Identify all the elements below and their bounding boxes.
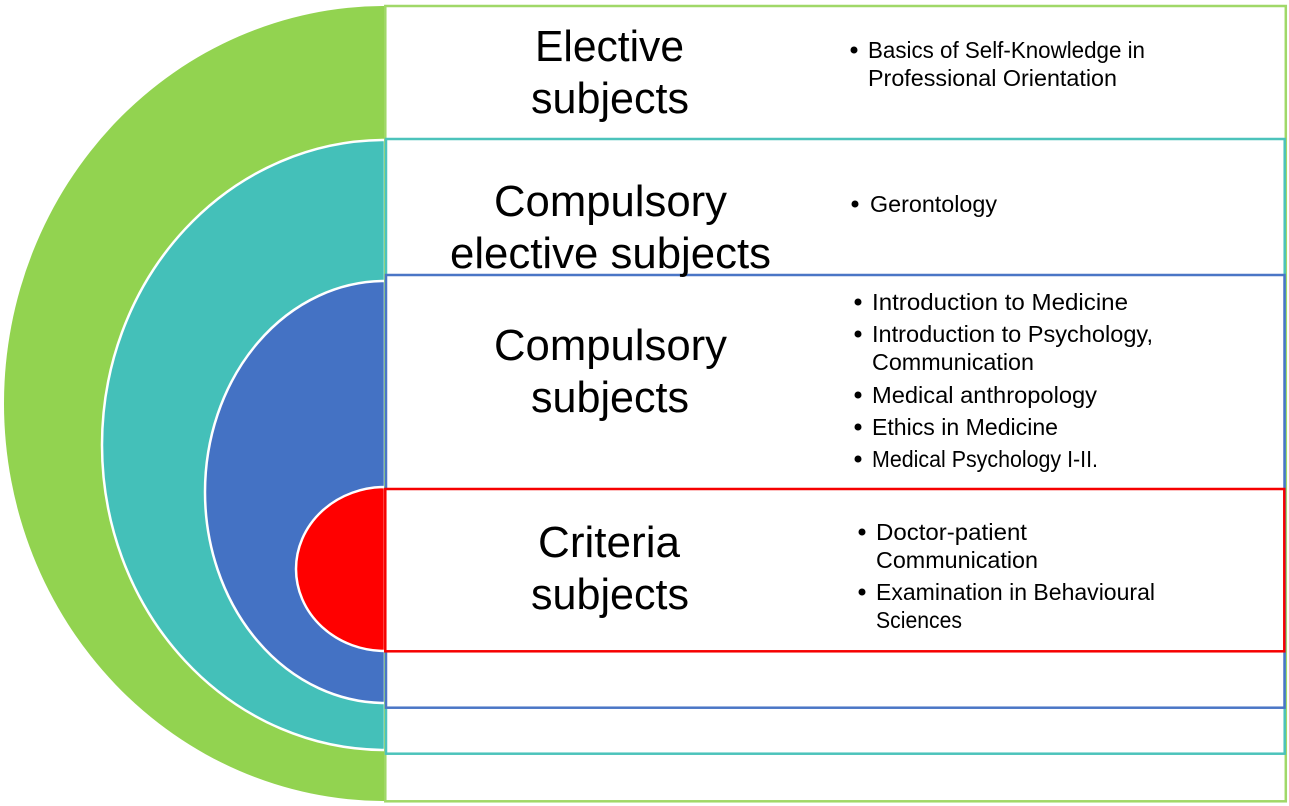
list: criteria subjects: Communication [876,547,1038,573]
heading: criteria subjects [531,518,689,619]
box: criteria outline [385,489,1284,651]
list: elective subjects: Professional Orientation [868,65,1117,91]
list: compulsory elective subjects: Gerontology [870,191,997,217]
heading: compulsory subjects: Compulsory [494,321,727,370]
heading: compulsory elective subjects: Compulsory [494,177,727,226]
box: compulsory outline [386,275,1284,708]
heading: compulsory subjects: subjects [531,373,689,422]
half circle: criteria (red) [296,487,385,651]
list: compulsory subjects: Introduction to Medicine [872,289,1128,315]
heading: criteria subjects: subjects [531,570,689,619]
list: compulsory subjects: Introduction to Psychology, [872,321,1153,347]
heading: compulsory elective subjects: elective subjects [450,229,771,278]
heading: criteria subjects: Criteria [538,518,681,567]
list: compulsory subjects: Ethics in Medicine [872,414,1058,440]
list: criteria subjects: Sciences [876,607,962,633]
heading: elective subjects: subjects [531,74,689,123]
list: criteria subjects [858,519,1155,633]
box: elective outline [385,6,1286,801]
heading: elective subjects [531,22,689,123]
heading: compulsory subjects [494,321,727,422]
list: compulsory subjects [854,289,1153,472]
list: compulsory subjects: Medical Psychology I-II. [872,446,1098,472]
list: criteria subjects: Doctor-patient [876,519,1028,545]
heading: compulsory elective subjects [450,177,771,278]
list: compulsory subjects: Medical anthropology [872,382,1098,408]
box: compulsory elective outline [386,139,1285,754]
list: elective subjects [850,37,1145,91]
list: elective subjects: Basics of Self-Knowledge in [868,37,1145,63]
half circle: compulsory (blue) [205,281,385,703]
heading: elective subjects: Elective [535,22,684,71]
list: criteria subjects: Examination in Behavioural [876,579,1155,605]
half circle: compulsory elective (teal) [102,140,385,750]
list: compulsory subjects: Communication [872,349,1034,375]
half circle: elective (green) [4,6,385,801]
